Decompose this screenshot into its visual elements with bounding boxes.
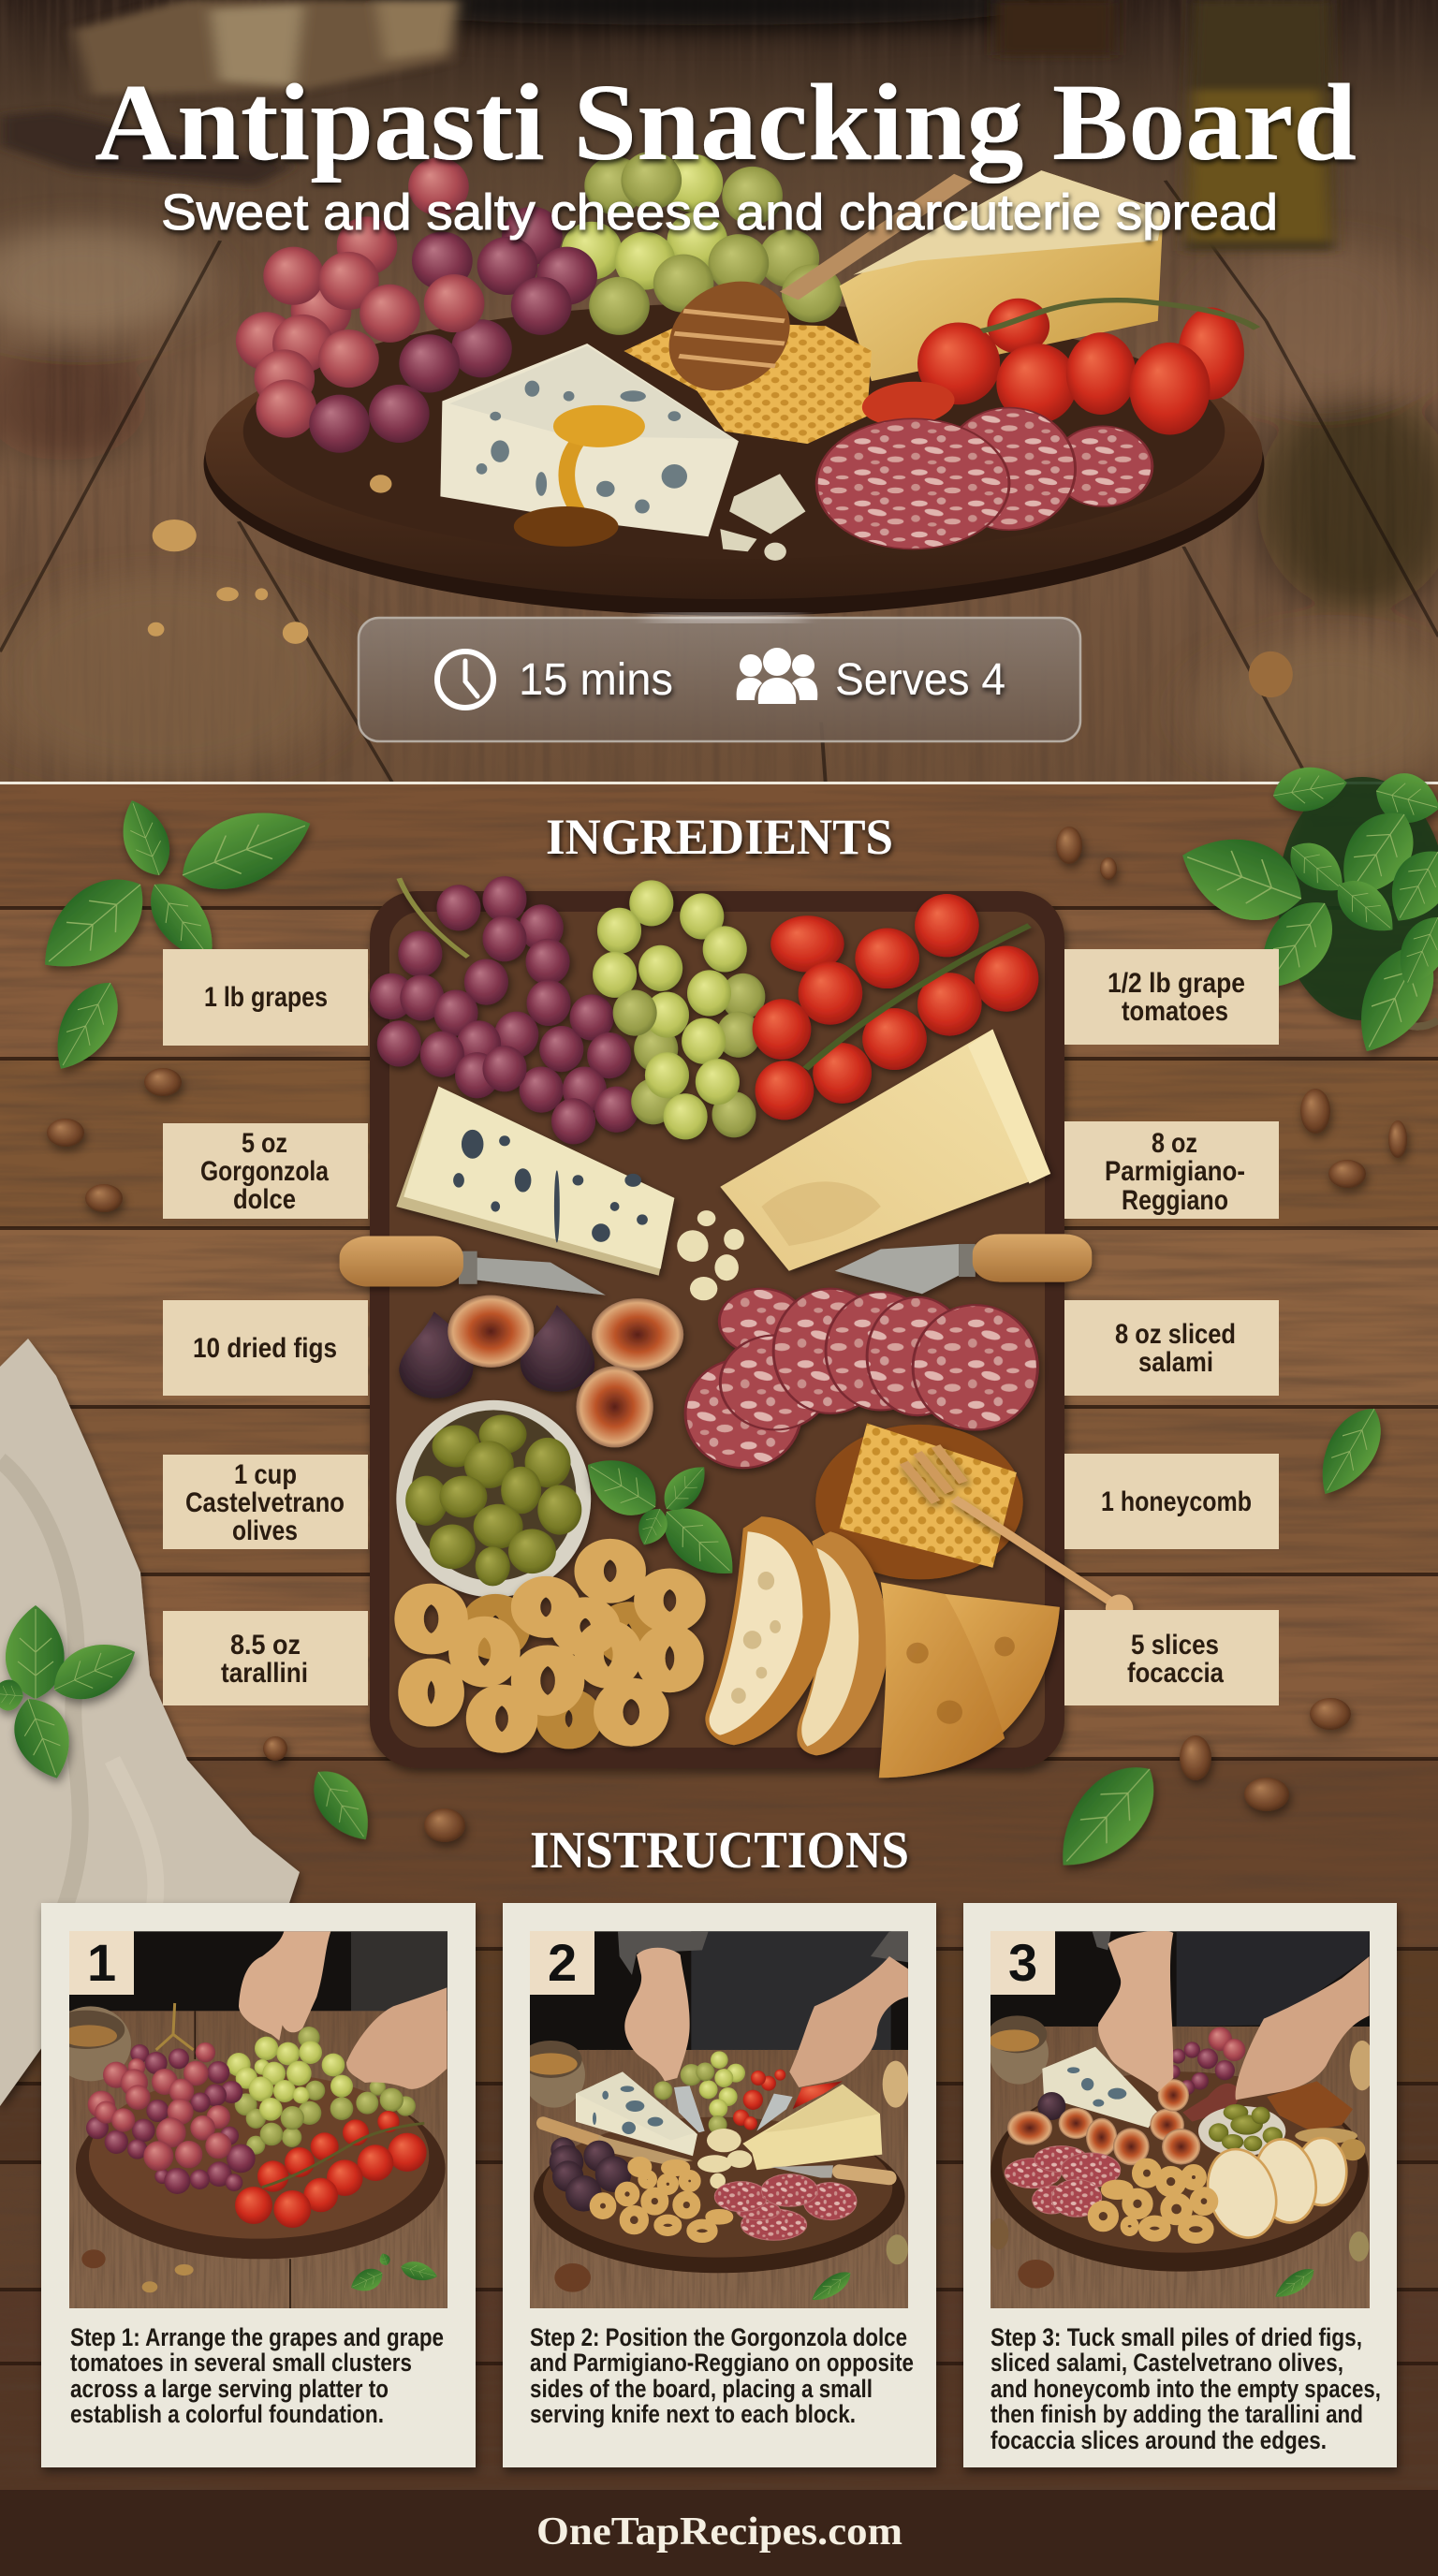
footer bar xyxy=(0,2490,1438,2576)
basil plant top right xyxy=(1169,761,1438,1066)
prep time: 15 mins xyxy=(519,655,673,705)
background bread and olive oil bottle, blurred xyxy=(0,0,1335,251)
step 1 text xyxy=(70,2323,444,2428)
red grapes xyxy=(370,876,638,1144)
icon: clock xyxy=(437,651,493,708)
label: tarallini: tarallini xyxy=(221,1658,308,1689)
label: focaccia: focaccia xyxy=(1127,1658,1224,1689)
label: gorgonzola: Gorgonzola xyxy=(200,1156,329,1187)
step 1 card xyxy=(41,1903,476,2467)
icon: people xyxy=(737,648,817,704)
cheese crumbs xyxy=(720,474,805,561)
step 3 text: then finish by adding the tarallini and xyxy=(990,2400,1363,2428)
round wooden plate xyxy=(204,303,1264,616)
step 2 text: sides of the board, placing a small xyxy=(530,2375,873,2403)
label: olives xyxy=(163,1455,368,1549)
label: figs xyxy=(163,1300,368,1396)
olive bowl xyxy=(396,1400,591,1597)
honey dipper handle xyxy=(789,178,963,296)
tarallini xyxy=(409,1549,691,1742)
subtitle: Sweet and salty cheese and charcuterie spread xyxy=(161,184,1278,241)
label: olives: olives xyxy=(232,1515,298,1546)
step 1 text: Step 1: Arrange the grapes and grape xyxy=(70,2323,444,2351)
label: tarallini xyxy=(163,1611,368,1705)
cherry tomatoes on the vine xyxy=(849,299,1257,434)
number badge 1 xyxy=(69,1931,134,1995)
serves: Serves 4 xyxy=(835,655,1005,705)
basil on board xyxy=(575,1444,750,1590)
hero photo: rustic table with round cheese plate xyxy=(0,0,1438,787)
title: Antipasti Snacking Board xyxy=(95,61,1357,183)
number badge 3: 3 xyxy=(1008,1933,1037,1992)
step 3 text: focaccia slices around the edges. xyxy=(990,2426,1327,2454)
scattered nuts xyxy=(47,827,1407,1842)
step 2 text: serving knife next to each block. xyxy=(530,2400,856,2428)
step 1 text: tomatoes in several small clusters xyxy=(70,2349,412,2377)
step 3 text: sliced salami, Castelvetrano olives, xyxy=(990,2349,1343,2377)
step 2 text: Step 2: Position the Gorgonzola dolce xyxy=(530,2323,907,2351)
basil top left xyxy=(23,792,323,1081)
gorgonzola wedge xyxy=(396,1087,674,1276)
label: tomatoes: tomatoes xyxy=(1122,996,1228,1027)
blue cheese wedge with honey xyxy=(440,344,739,547)
board food xyxy=(340,876,1133,1778)
label: focaccia: 5 slices xyxy=(1131,1630,1219,1661)
label: tomatoes xyxy=(1064,949,1279,1045)
label: gorgonzola xyxy=(163,1123,368,1219)
honey dipper head xyxy=(668,281,790,391)
label: honeycomb: 1 honeycomb xyxy=(1101,1486,1252,1517)
light patches on table xyxy=(0,0,1438,787)
green grapes xyxy=(562,152,843,335)
label: tomatoes: 1/2 lb grape xyxy=(1108,968,1245,999)
label: salami: 8 oz sliced xyxy=(1115,1319,1236,1350)
heading: ingredients: INGREDIENTS xyxy=(546,809,893,865)
label: olives: Castelvetrano xyxy=(185,1487,345,1518)
label: parmigiano: Parmigiano- xyxy=(1105,1156,1245,1187)
bread slices and focaccia xyxy=(705,1516,1060,1778)
side basil leaves xyxy=(301,1398,1395,1887)
green grapes xyxy=(593,880,765,1139)
wooden serving board xyxy=(370,891,1064,1768)
step 1 photo xyxy=(47,1931,449,2310)
label: grapes xyxy=(163,949,368,1046)
ingredient labels left xyxy=(163,949,368,1705)
cheese crumbs xyxy=(677,1210,744,1300)
figs xyxy=(399,1295,683,1447)
honey dipper xyxy=(903,1446,1133,1622)
red grapes xyxy=(236,157,597,453)
footer site name: OneTapRecipes.com xyxy=(536,2510,902,2554)
right cheese knife xyxy=(835,1234,1092,1294)
label: grapes: 1 lb grapes xyxy=(204,982,328,1013)
label: salami xyxy=(1064,1300,1279,1396)
step 2 text xyxy=(530,2323,914,2428)
honeycomb on dish xyxy=(815,1423,1023,1579)
label: honeycomb xyxy=(1064,1454,1279,1549)
step 3 text: Step 3: Tuck small piles of dried figs, xyxy=(990,2323,1362,2351)
table crumbs xyxy=(148,475,1293,697)
number badge 3 xyxy=(990,1931,1055,1995)
number badge 1: 1 xyxy=(87,1933,116,1992)
basil on napkin xyxy=(0,1605,145,1787)
label: figs: 10 dried figs xyxy=(193,1333,337,1364)
heading: instructions: INSTRUCTIONS xyxy=(530,1822,909,1880)
label: gorgonzola: 5 oz xyxy=(242,1128,287,1159)
step 3 photo xyxy=(988,1931,1374,2310)
label: olives: 1 cup xyxy=(234,1459,297,1490)
number badge 2: 2 xyxy=(548,1933,577,1992)
parmigiano wedge xyxy=(720,1030,1050,1271)
hard cheese wedge xyxy=(840,170,1164,381)
salami slices xyxy=(816,408,1152,549)
label: parmigiano: Reggiano xyxy=(1122,1185,1228,1216)
step 1 text: establish a colorful foundation. xyxy=(70,2400,384,2428)
divider line under hero xyxy=(0,782,1438,784)
wood table background for lower sections xyxy=(0,784,1438,2490)
step 1 text: across a large serving platter to xyxy=(70,2375,389,2403)
number badge 2 xyxy=(530,1931,594,1995)
label: gorgonzola: dolce xyxy=(233,1184,296,1215)
tomatoes on vine xyxy=(753,894,1038,1120)
step 2 card xyxy=(503,1903,936,2467)
label: focaccia xyxy=(1064,1610,1279,1705)
label: parmigiano: 8 oz xyxy=(1152,1128,1197,1159)
time and servings pill xyxy=(359,613,1080,741)
step 3 card xyxy=(963,1903,1397,2467)
step 3 text xyxy=(990,2323,1381,2454)
label: tarallini: 8.5 oz xyxy=(230,1630,301,1661)
label: salami: salami xyxy=(1138,1347,1213,1378)
step 2 text: and Parmigiano-Reggiano on opposite xyxy=(530,2349,914,2377)
ingredient labels right xyxy=(1064,949,1279,1705)
label: parmigiano xyxy=(1064,1121,1279,1219)
plank seams xyxy=(0,181,1438,786)
sliced salami xyxy=(685,1289,1037,1468)
honeycomb xyxy=(624,321,872,444)
left cheese knife xyxy=(340,1237,606,1295)
step 2 photo xyxy=(520,1931,910,2310)
linen napkin xyxy=(0,1339,300,2106)
